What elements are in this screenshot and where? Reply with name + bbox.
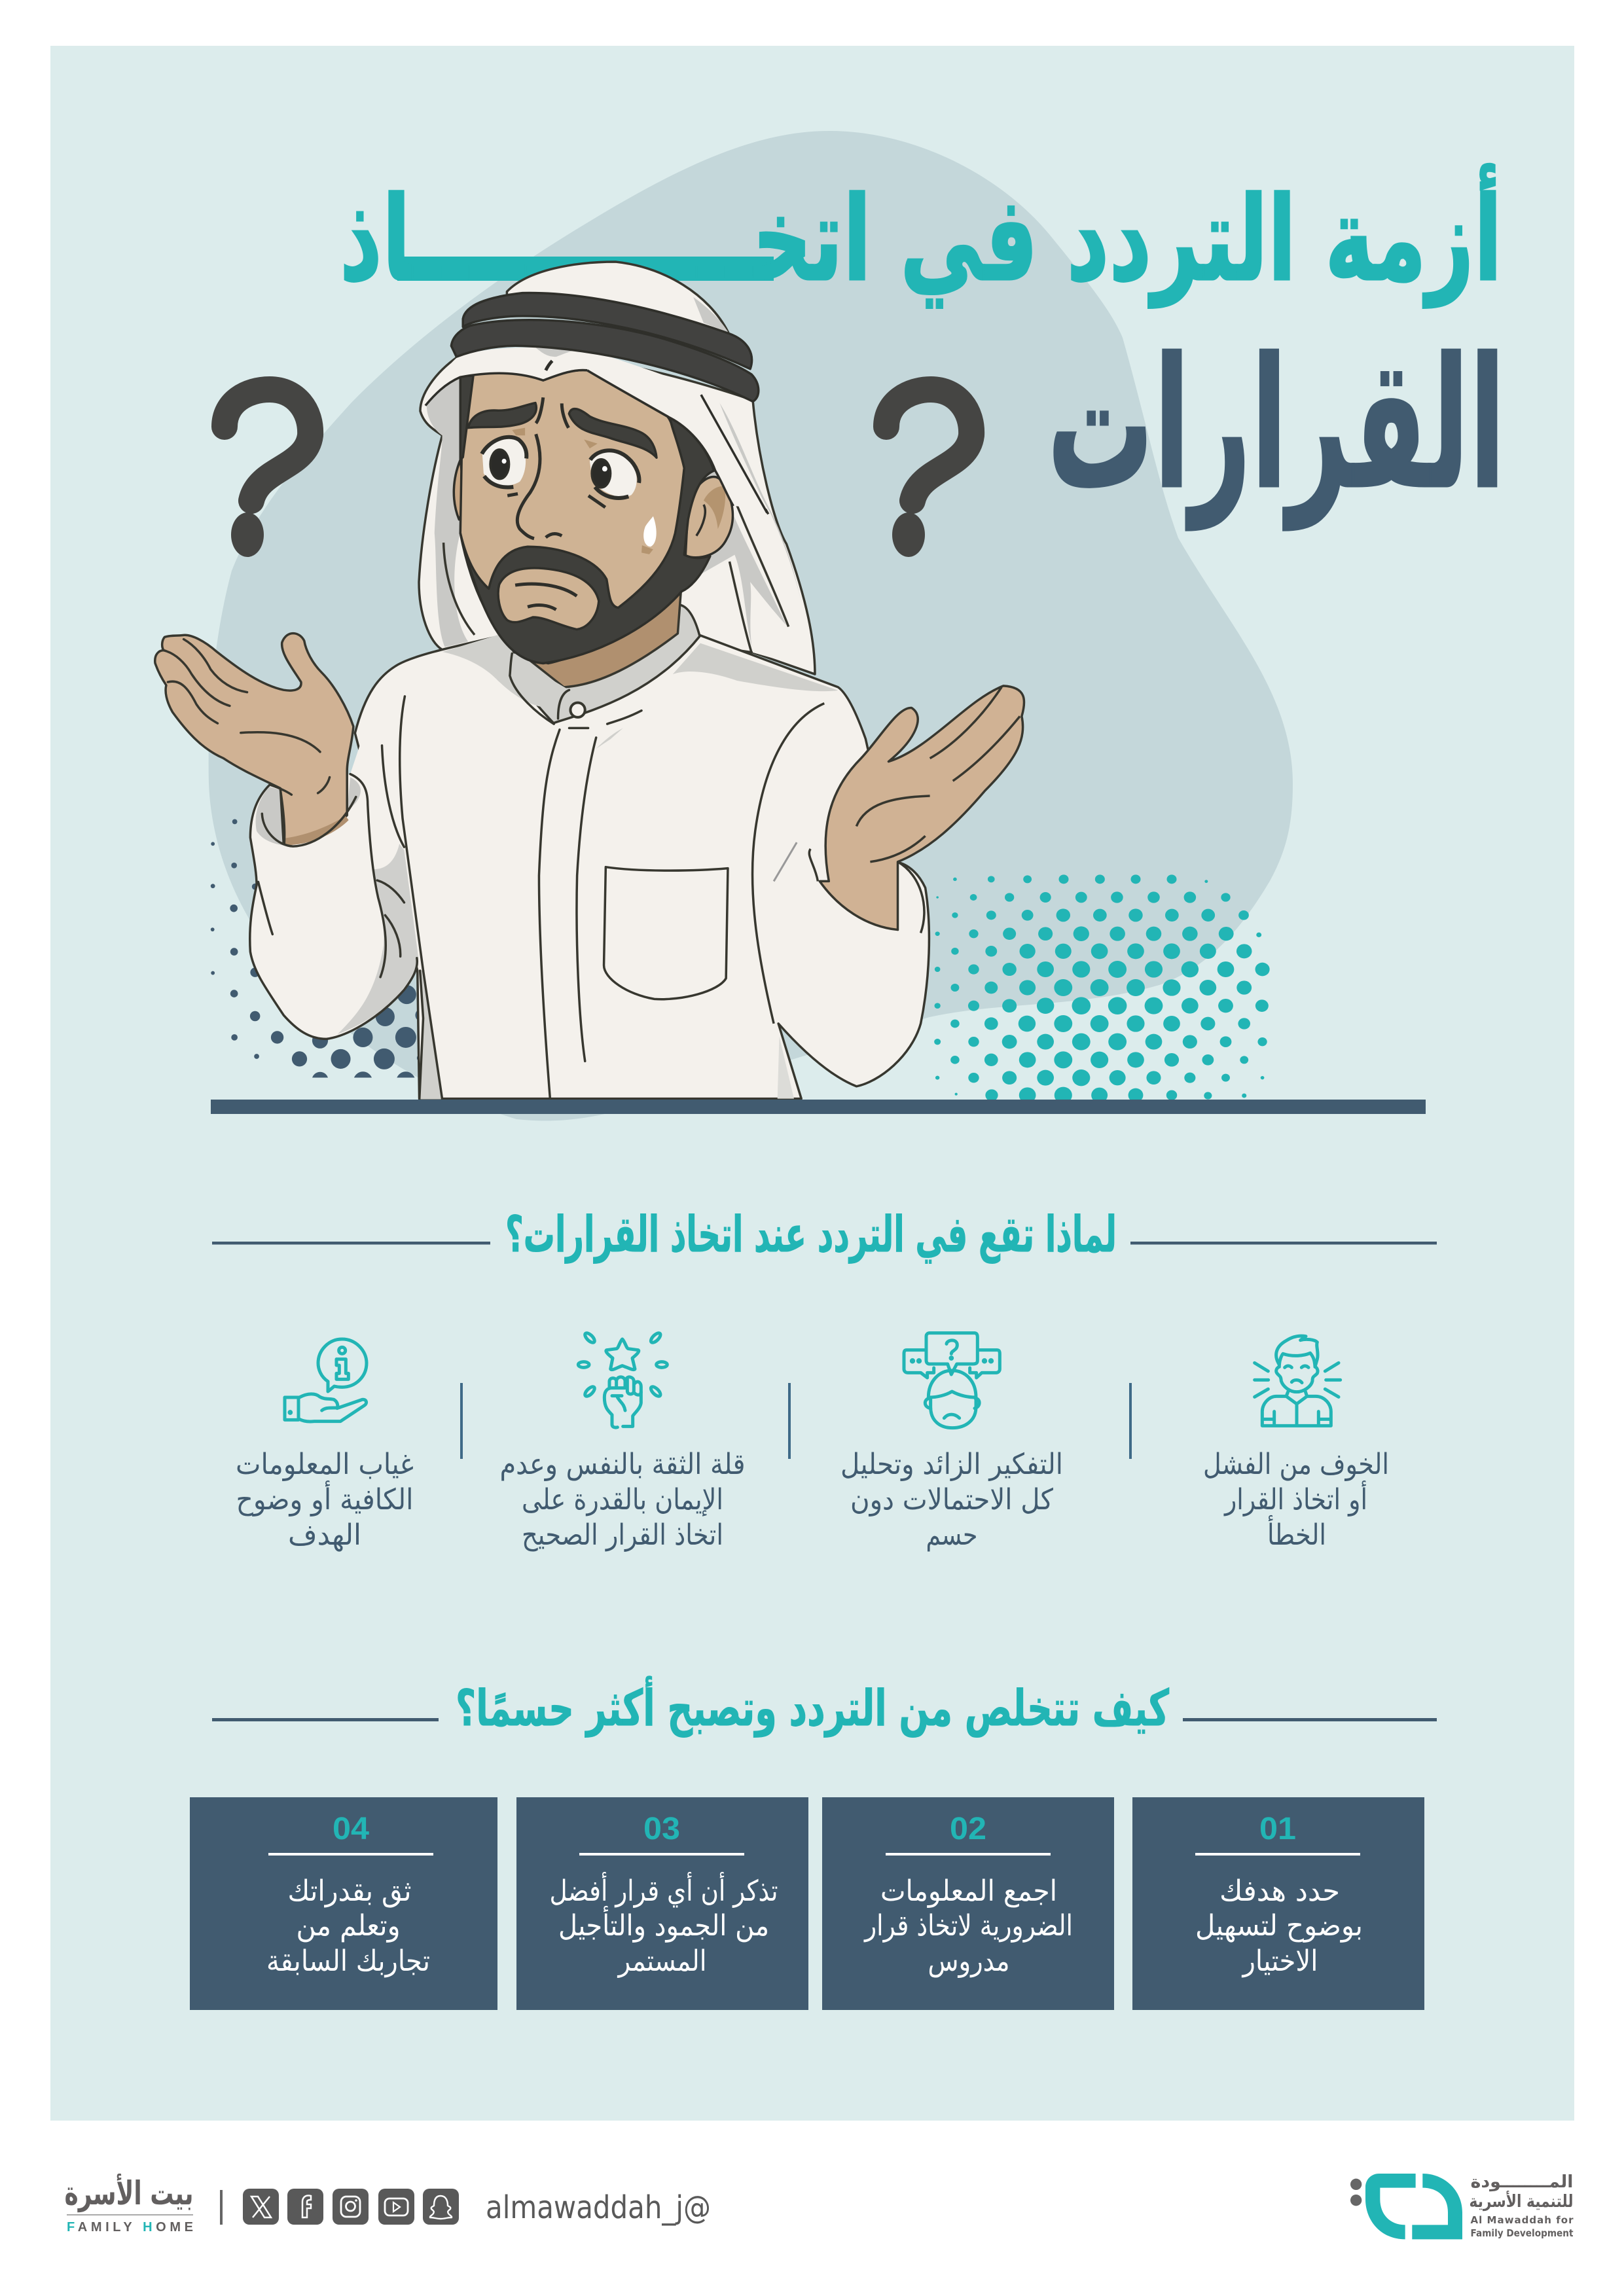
cause 2: overthinking — [840, 1333, 1063, 1552]
halftone dots: navy — [211, 819, 428, 1090]
logo: Family Home: بيت الأسرة — [64, 2173, 194, 2213]
halftone dots: teal — [934, 874, 1270, 1103]
cause 3: low self confidence — [500, 1331, 745, 1552]
card 01: الاختيار — [1242, 1945, 1318, 1978]
face, beard and headband — [425, 293, 767, 663]
section heading: why: لماذا تقع في التردد عند اتخاذ القرارات؟ — [505, 1205, 1117, 1264]
ear — [685, 477, 732, 558]
text: كل الاحتمالات دون — [850, 1483, 1053, 1516]
card 02 — [822, 1797, 1114, 2010]
forehead fold — [425, 348, 767, 509]
card 01: حدد هدفك — [1219, 1874, 1340, 1908]
thobe body and right sleeve — [355, 636, 929, 1099]
text: الإيمان بالقدرة على — [522, 1483, 723, 1516]
mouth area — [498, 568, 599, 630]
icon: head with speech bubbles — [904, 1333, 1000, 1428]
icon: stressed man — [1255, 1336, 1341, 1426]
text: الهدف — [288, 1518, 361, 1552]
card 04 — [190, 1797, 497, 2010]
ghutra headdress back — [419, 262, 815, 674]
footer divider — [220, 2190, 223, 2225]
text: غياب المعلومات — [236, 1448, 414, 1481]
card 02: الضرورية لاتخاذ قرار — [863, 1909, 1073, 1943]
card 02: 02 — [950, 1812, 986, 1846]
card 03: من الجمود والتأجيل — [558, 1905, 769, 1943]
divider — [1129, 1383, 1132, 1459]
text: قلة الثقة بالنفس وعدم — [500, 1448, 745, 1481]
nose and wrinkles — [507, 397, 605, 539]
hand — [155, 634, 353, 844]
text — [840, 1448, 1063, 1552]
eyes — [482, 439, 526, 486]
right hand — [809, 686, 1024, 933]
cause 4: missing information — [236, 1339, 414, 1552]
text: حسم — [926, 1518, 978, 1552]
card 01: 01 — [1259, 1812, 1296, 1846]
collar shade — [442, 634, 569, 708]
card 04: 04 — [333, 1812, 369, 1846]
illustration: worried man — [155, 262, 1024, 1099]
logo text: المــــــــودة — [1470, 2172, 1574, 2192]
shelf bar — [211, 1100, 1426, 1114]
text: أو اتخاذ القرار — [1223, 1480, 1367, 1516]
chest and torso lines — [420, 971, 442, 1099]
card 03: المستمر — [617, 1945, 707, 1978]
icon: YouTube — [378, 2189, 414, 2225]
left sleeve, hand and chest lines — [155, 634, 641, 1099]
text: اتخاذ القرار الصحيح — [522, 1518, 723, 1552]
logo: Al Mawaddah — [1350, 2172, 1574, 2239]
text: الخوف من الفشل — [1203, 1448, 1389, 1481]
card 04: تجاربك السابقة — [266, 1945, 430, 1978]
social icons — [243, 2189, 459, 2225]
placket lines — [539, 730, 596, 1099]
sweat drop — [643, 516, 657, 547]
icon: hand with info bubble — [285, 1339, 367, 1422]
social handle: almawaddah_j@ — [486, 2189, 711, 2226]
logo text: Family Development — [1470, 2227, 1574, 2239]
divider — [788, 1383, 791, 1459]
logo text — [1469, 2172, 1574, 2239]
icon: Snapchat — [423, 2189, 459, 2225]
cause 1: fear of failure — [1203, 1336, 1389, 1552]
card 04: وتعلم من — [296, 1909, 401, 1943]
text: الخطأ — [1267, 1515, 1326, 1552]
blob background shape — [209, 131, 1293, 1121]
hair and beard — [460, 418, 714, 663]
agal lower band — [451, 320, 759, 401]
card 03: 03 — [643, 1812, 680, 1846]
logo mark — [1350, 2174, 1462, 2239]
icon: question mark right — [886, 389, 971, 557]
eyebrows — [468, 403, 536, 428]
card 02: اجمع المعلومات — [880, 1874, 1057, 1908]
card 04: ثق بقدراتك — [288, 1874, 411, 1908]
icon: question mark left — [225, 389, 310, 557]
icon: fist with star — [578, 1331, 667, 1427]
text: التفكير الزائد وتحليل — [840, 1448, 1063, 1481]
text: الكافية أو وضوح — [236, 1480, 414, 1516]
logo text: Al Mawaddah for — [1470, 2214, 1574, 2226]
icon: X — [243, 2189, 279, 2225]
text — [236, 1448, 414, 1552]
divider — [460, 1383, 463, 1459]
text — [500, 1448, 745, 1552]
logo text: للتنمية الأسرية — [1469, 2191, 1574, 2212]
cuff opening — [256, 787, 283, 846]
card 01: بوضوح لتسهيل — [1195, 1909, 1363, 1943]
logo: Family Home — [64, 2173, 194, 2234]
text — [1203, 1448, 1389, 1552]
icon: Facebook — [287, 2189, 323, 2225]
logo: Family Home: F AMILY H OME — [67, 2220, 193, 2234]
card 03: تذكر أن أي قرار أفضل — [550, 1872, 778, 1908]
section heading: how: كيف تتخلص من التردد وتصبح أكثر حسمًا؟ — [456, 1676, 1170, 1738]
card 03 — [516, 1797, 808, 2010]
collar button — [570, 703, 585, 717]
collar and neck — [509, 582, 700, 723]
card 01 — [1132, 1797, 1424, 2010]
icon: Instagram — [333, 2189, 369, 2225]
agal upper band — [463, 293, 752, 369]
card 02: مدروس — [928, 1945, 1009, 1978]
